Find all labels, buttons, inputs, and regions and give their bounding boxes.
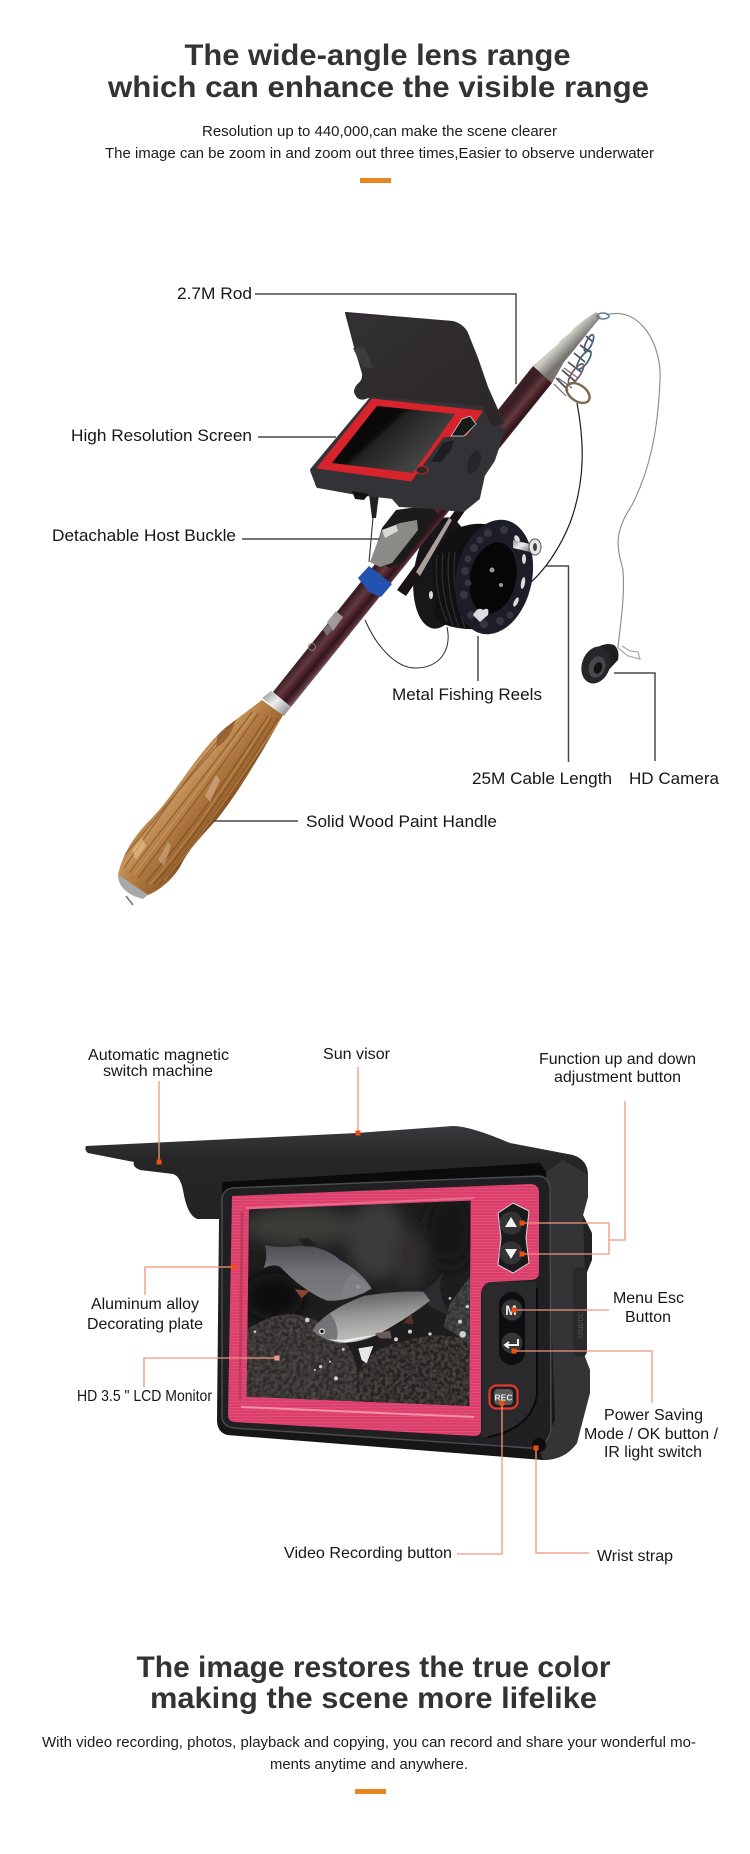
callout: video recording button [284, 1400, 504, 1562]
handle ferrule [262, 691, 291, 716]
callout: menu esc button: Menu Esc [613, 1290, 684, 1307]
callout: HD Camera [614, 673, 720, 788]
description text: The image can be zoom in and zoom out three times,Easier to observe underwater [105, 145, 654, 162]
callout: function up and down: Function up and down [539, 1051, 696, 1068]
callout: LCD monitor: HD 3.5 " LCD Monitor [77, 1388, 213, 1405]
rocks [247, 1277, 470, 1407]
callout: power saving OK button [512, 1348, 719, 1461]
rear fish [263, 1238, 372, 1301]
title: which can enhance the visible range [107, 71, 649, 104]
callout: LCD monitor [77, 1356, 280, 1405]
wrist strap hole [532, 1438, 546, 1452]
monitor red frame [317, 399, 482, 481]
callout: function up and down: adjustment button [554, 1069, 681, 1086]
lower button panel [482, 1282, 536, 1437]
blue tape bands [358, 447, 497, 597]
monitor screen [332, 406, 455, 473]
callout: aluminum alloy plate: Aluminum alloy [91, 1296, 199, 1313]
groove line [488, 1288, 537, 1437]
description text [105, 123, 654, 162]
callout: video recording button: Video Recording button [284, 1545, 452, 1562]
menu and OK buttons [499, 1292, 525, 1365]
callout: sun visor [323, 1046, 391, 1136]
pink aluminium plate [228, 1184, 539, 1436]
title [107, 39, 649, 104]
cable: lower loop [365, 620, 448, 668]
up and down buttons [498, 1203, 529, 1273]
heading block: wide-angle lens [105, 39, 654, 183]
sparkles [254, 1297, 469, 1380]
callout: HD Camera: HD Camera [629, 769, 720, 788]
monitor cable connector [369, 494, 379, 562]
title: The image restores the true color [136, 1651, 611, 1684]
callout: High Resolution Screen: High Resolution Screen [71, 426, 252, 445]
callout: function up and down [520, 1051, 696, 1256]
callout: Solid Wood Paint Handle: Solid Wood Paint Handle [306, 812, 497, 831]
callout: wrist strap [534, 1446, 673, 1565]
cable: outer line to camera [606, 313, 660, 648]
front bezel [222, 1176, 551, 1448]
USB door: USB/DC [578, 1312, 585, 1338]
callout: aluminum alloy plate: Decorating plate [87, 1316, 203, 1333]
cable: inner line to reel [530, 403, 582, 583]
camera [576, 642, 640, 688]
rod tip section and guides [533, 312, 609, 407]
orange accent bar [360, 178, 391, 183]
orange accent bar [355, 1789, 386, 1794]
visor tab [353, 348, 373, 368]
REC button: REC [495, 1392, 512, 1402]
callout: power saving OK button: Power Saving [604, 1407, 703, 1424]
callout: menu esc button [512, 1290, 684, 1326]
small monitor with visor [312, 313, 503, 510]
fishing reel [406, 512, 543, 642]
callout: power saving OK button: IR light switch [604, 1444, 702, 1461]
callout: power saving OK button: Mode / OK button / [584, 1426, 719, 1443]
callout: Metal Fishing Reels: Metal Fishing Reels [392, 685, 542, 704]
REC button [490, 1386, 518, 1408]
title: making the scene more lifelike [150, 1682, 597, 1715]
rod logo marks [308, 611, 343, 650]
host buckle clamp [370, 490, 476, 596]
callout: 2.7M Rod: 2.7M Rod [177, 284, 252, 303]
callout: 2.7M Rod [177, 284, 516, 384]
callout: wrist strap: Wrist strap [597, 1548, 673, 1565]
callout: 25M Cable Length [472, 566, 612, 788]
housing side panel [540, 1160, 590, 1460]
callout: sun visor: Sun visor [323, 1046, 391, 1063]
callout: automatic magnetic switch [88, 1047, 229, 1164]
callout: aluminum alloy plate [87, 1264, 236, 1333]
title: The wide-angle lens range [184, 39, 570, 72]
rod shaft [273, 366, 552, 707]
heading block: true color [42, 1651, 696, 1794]
description text: With video recording, photos, playback and copying, you can record and share your wonderful mo- [42, 1734, 696, 1751]
underwater background [243, 1193, 473, 1320]
callout: 25M Cable Length: 25M Cable Length [472, 769, 612, 788]
monitor body [312, 398, 503, 510]
description text: ments anytime and anywhere. [270, 1756, 468, 1773]
description text [42, 1734, 696, 1773]
device housing and sun visor [85, 1126, 592, 1460]
callout: Detachable Host Buckle: Detachable Host Buckle [52, 526, 236, 545]
menu and OK buttons: M [505, 1302, 517, 1318]
visor shadow strip [222, 1163, 552, 1200]
panel: fishing rod product diagram [52, 284, 720, 905]
USB door [573, 1267, 587, 1357]
callout: automatic magnetic switch: switch machine [103, 1063, 213, 1080]
monitor visor [346, 313, 503, 428]
rod wood handle [118, 700, 284, 905]
callout: automatic magnetic switch: Automatic magnetic [88, 1047, 229, 1064]
front fish [313, 1270, 450, 1343]
callout: menu esc button: Button [625, 1309, 671, 1326]
monitor base [352, 491, 369, 500]
monitor buttons [416, 416, 484, 475]
LCD photo of fish [243, 1193, 473, 1407]
description text: Resolution up to 440,000,can make the scene clearer [202, 123, 557, 140]
panel: monitor close-up diagram [77, 1046, 719, 1565]
title [136, 1651, 611, 1715]
